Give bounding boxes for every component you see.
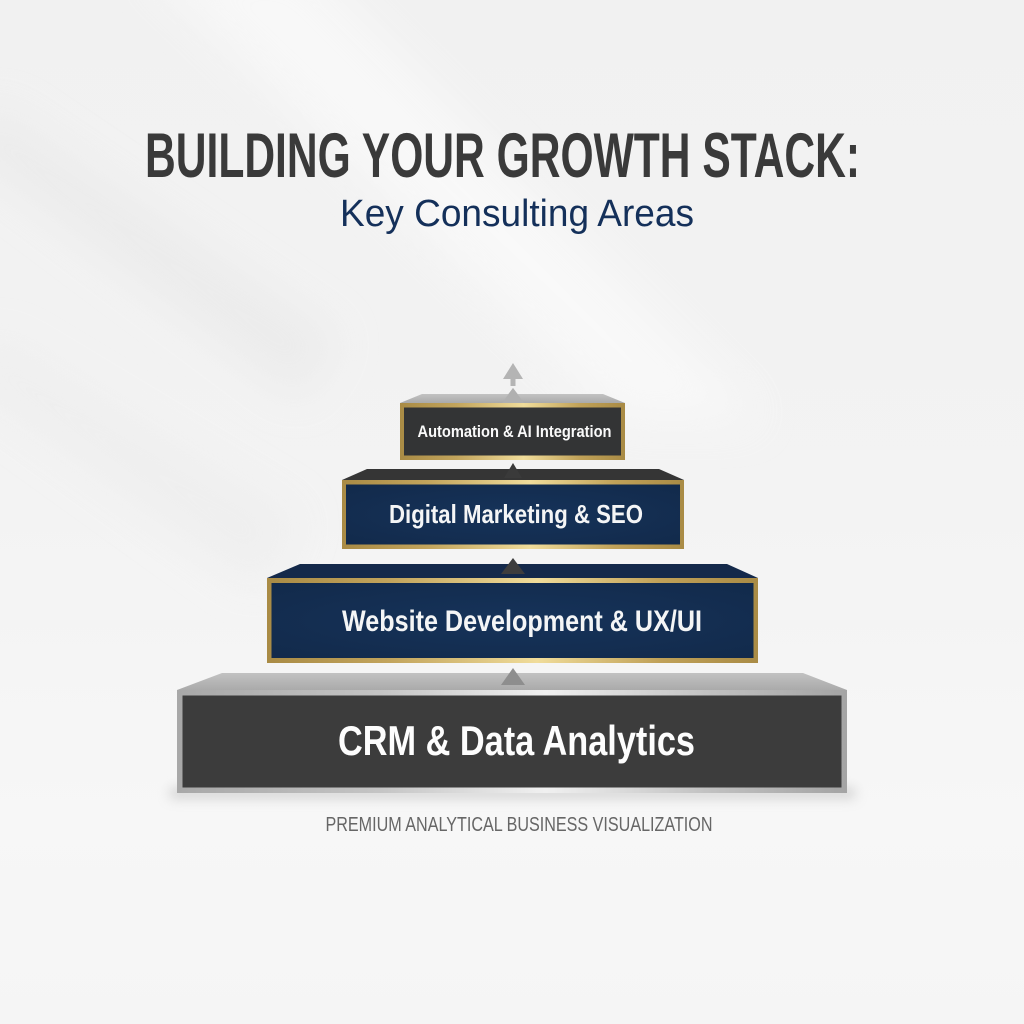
caption: PREMIUM ANALYTICAL BUSINESS VISUALIZATION [326, 814, 712, 836]
tier 3: Digital Marketing and SEO: Digital Marketing & SEO [389, 499, 643, 529]
tier 3: Digital Marketing and SEO [342, 463, 684, 549]
tier 1: CRM and Data Analytics: CRM & Data Analytics [338, 717, 695, 764]
tier 4: Automation and AI Integration [400, 388, 625, 460]
tier 2: Website Development and UX/UI: Website Development & UX/UI [342, 605, 702, 638]
tier 1: CRM and Data Analytics [170, 668, 855, 798]
pyramid stack [170, 363, 855, 798]
tier 4: Automation and AI Integration: Automation & AI Integration [418, 422, 612, 441]
arrow: growth direction [503, 363, 523, 401]
arrow: tier 2 to tier 1 [501, 668, 525, 685]
subtitle: Key Consulting Areas [340, 193, 694, 235]
tier 2: Website Development and UX/UI [267, 558, 758, 663]
arrow: tier 4 to tier 3 [504, 463, 522, 478]
arrow: tier 3 to tier 2 [501, 558, 525, 574]
